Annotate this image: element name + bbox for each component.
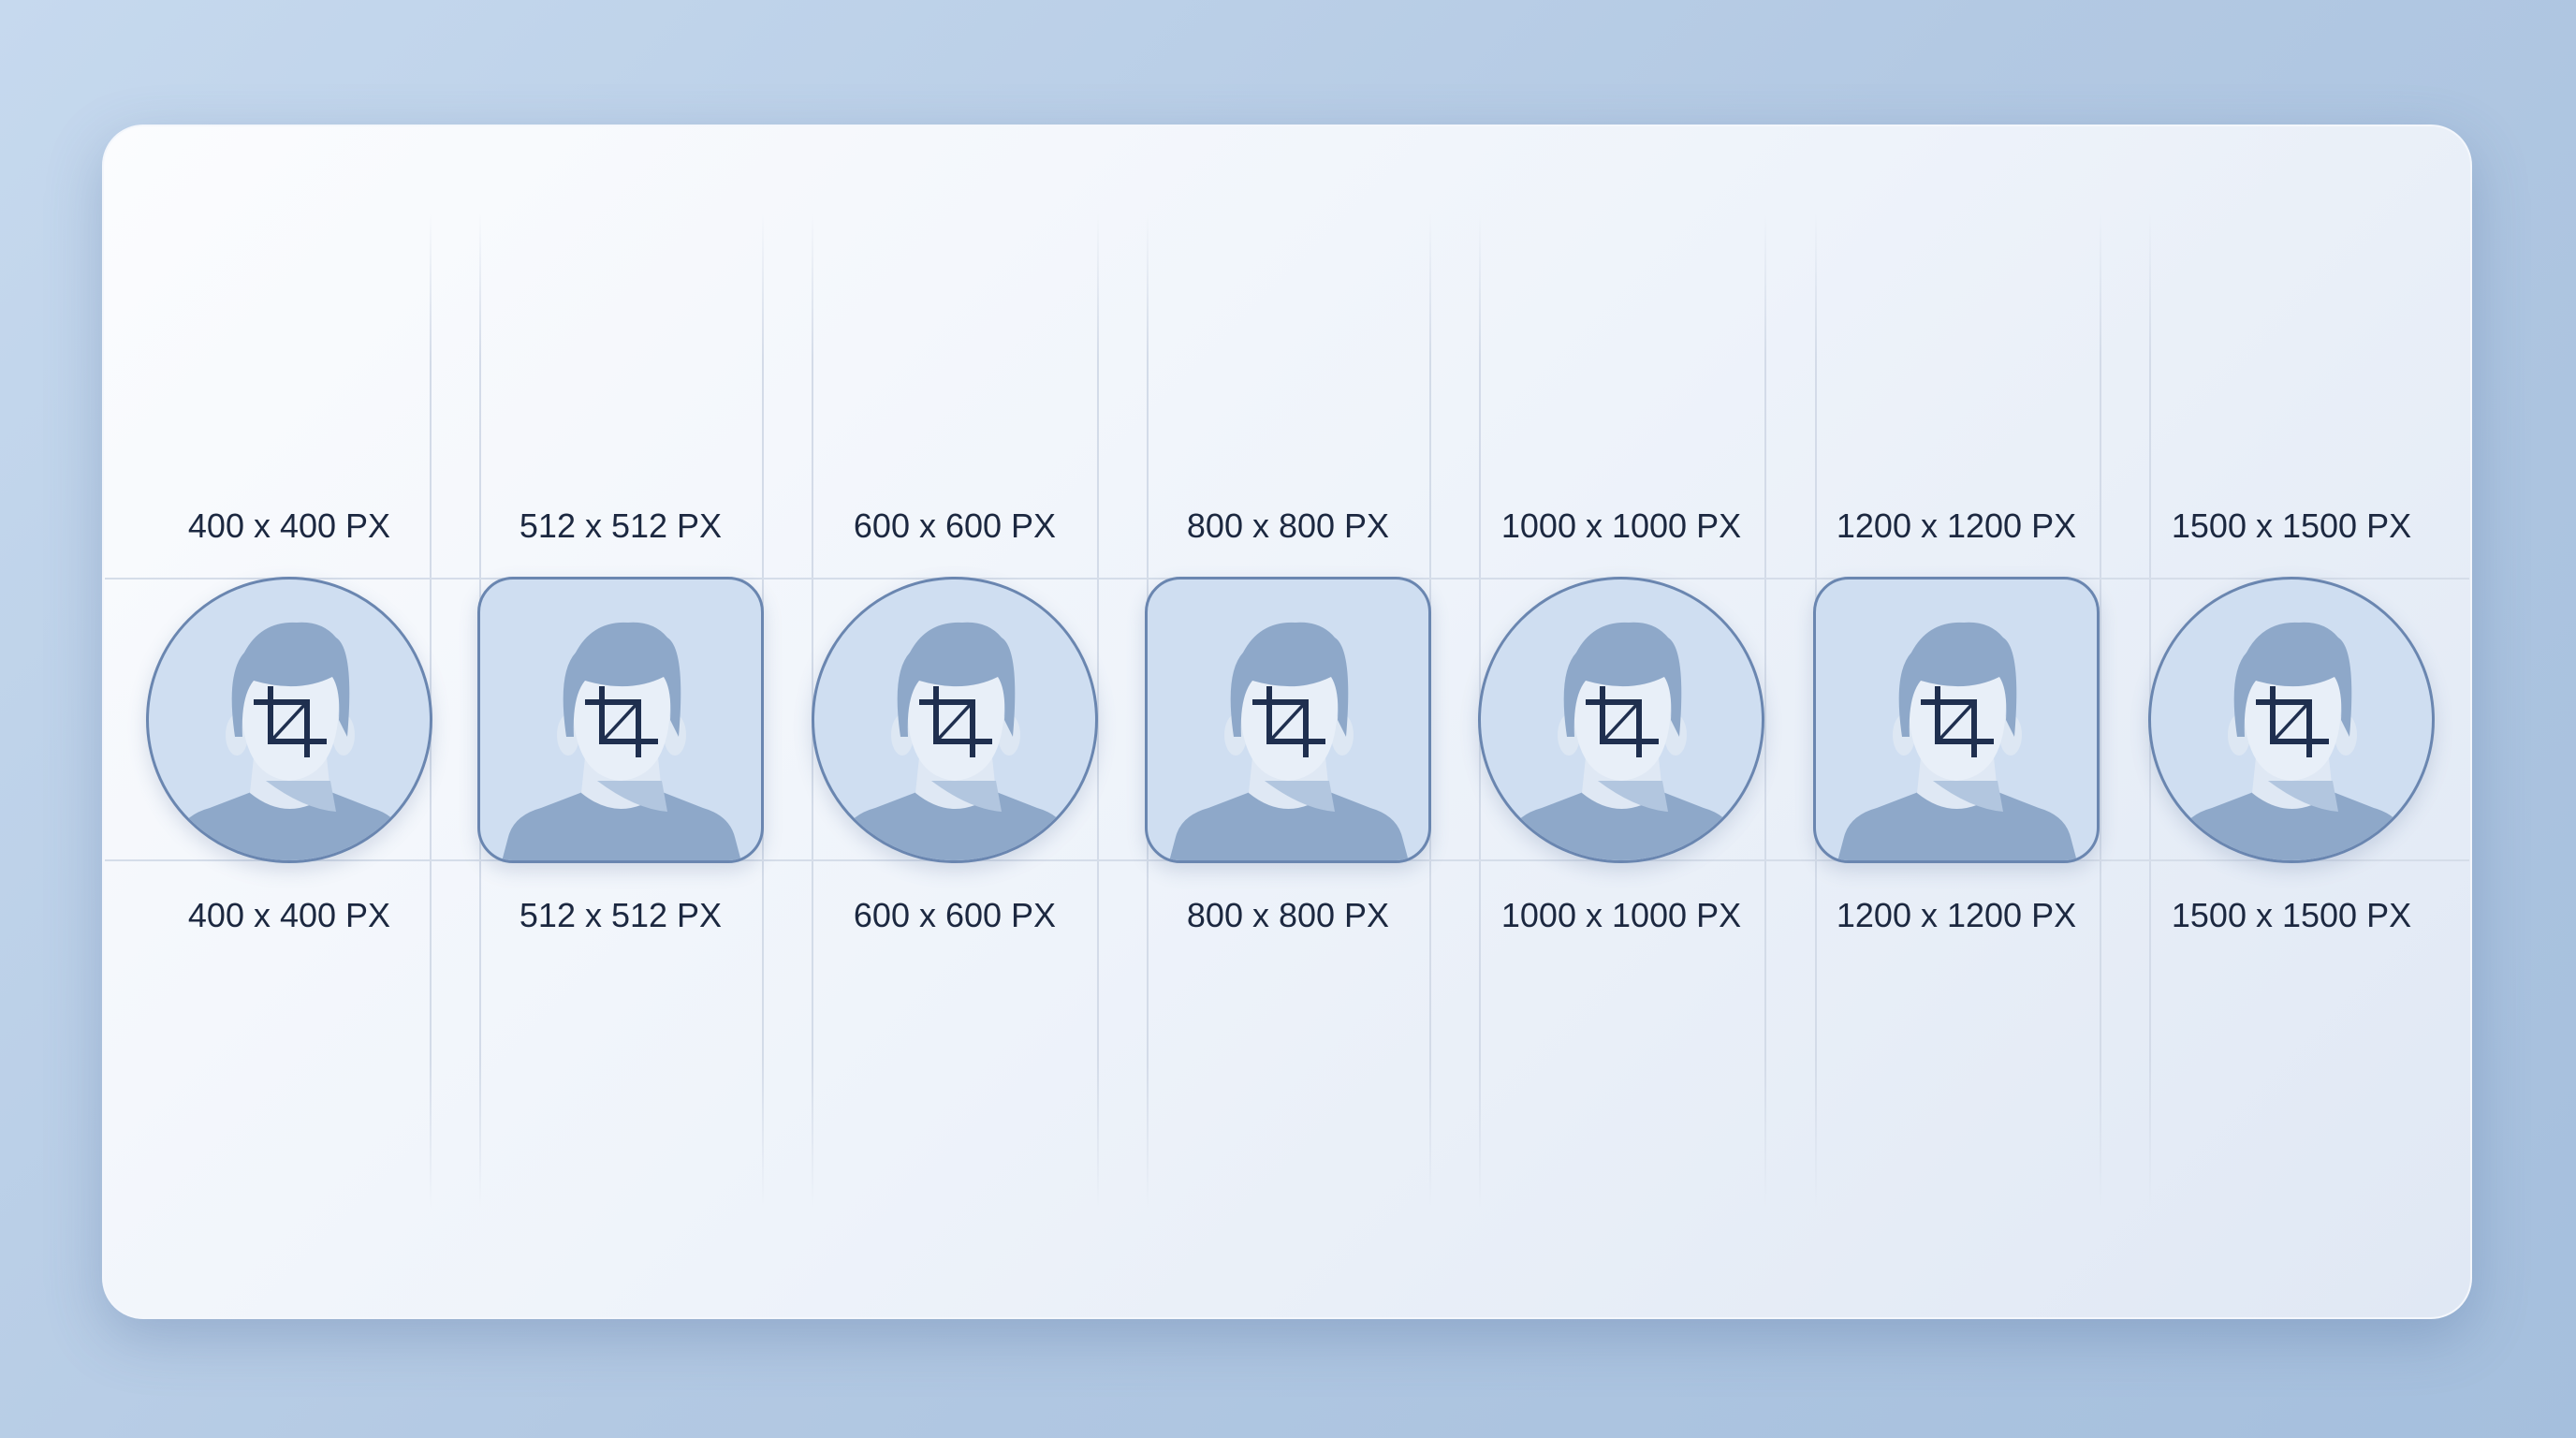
bottom labels: 1000 x 1000 PX	[1501, 896, 1741, 934]
avatar 1200 square	[1813, 577, 2100, 863]
top labels: 1500 x 1500 PX	[2172, 506, 2411, 545]
avatar 1000 circle	[1478, 577, 1764, 863]
top labels: 512 x 512 PX	[520, 506, 722, 545]
avatar 512 square	[477, 577, 764, 863]
card panel	[102, 125, 2472, 1319]
avatar 1500 circle	[2148, 577, 2435, 863]
top labels: 1000 x 1000 PX	[1501, 506, 1741, 545]
top labels	[188, 506, 2411, 545]
top labels: 600 x 600 PX	[854, 506, 1056, 545]
top labels: 400 x 400 PX	[188, 506, 390, 545]
avatar 600 circle	[812, 577, 1098, 863]
bottom labels: 400 x 400 PX	[188, 896, 390, 934]
avatar 800 square	[1145, 577, 1431, 863]
bottom labels	[188, 896, 2411, 934]
bottom labels: 800 x 800 PX	[1187, 896, 1389, 934]
bottom labels: 600 x 600 PX	[854, 896, 1056, 934]
bottom labels: 1500 x 1500 PX	[2172, 896, 2411, 934]
bottom labels: 1200 x 1200 PX	[1837, 896, 2076, 934]
top labels: 800 x 800 PX	[1187, 506, 1389, 545]
avatar 400 circle	[146, 577, 432, 863]
bottom labels: 512 x 512 PX	[520, 896, 722, 934]
top labels: 1200 x 1200 PX	[1837, 506, 2076, 545]
